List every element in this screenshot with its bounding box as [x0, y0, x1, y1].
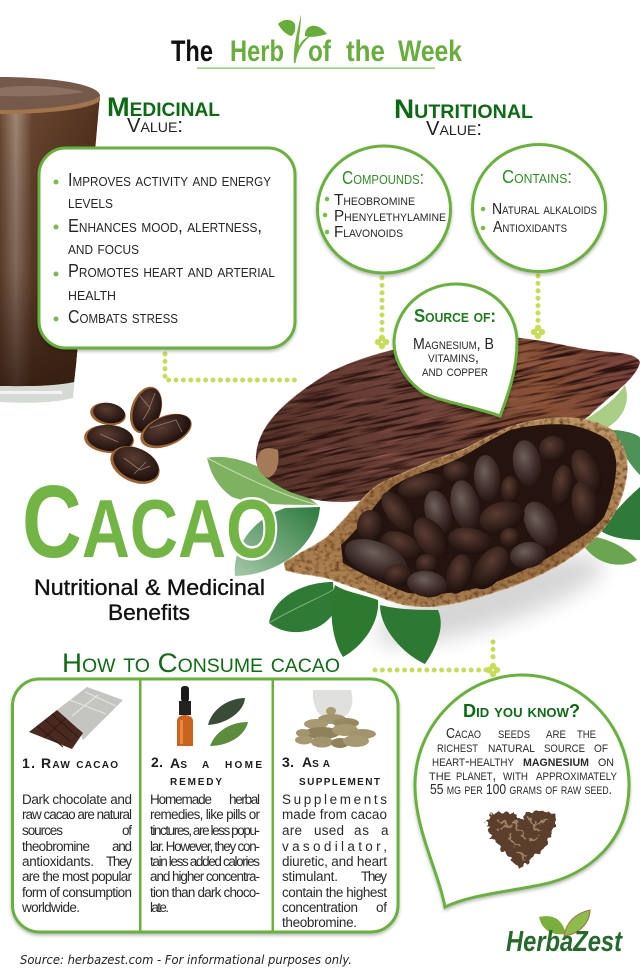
title: The Herb of the Week — [171, 14, 462, 69]
panel: contains circle: Contains: — [502, 167, 572, 187]
column: raw cacao: raw cacao are natural — [22, 807, 132, 822]
column: raw cacao: worldwide. — [21, 900, 80, 915]
icon: heart of cacao shavings — [488, 810, 556, 868]
column: supplement: of — [376, 900, 387, 915]
panel: source of bubble: Magnesium, B — [413, 336, 494, 353]
panel: contains circle: Natural alkaloids — [492, 201, 597, 218]
image: green leaves — [207, 385, 640, 664]
column: home remedy: a — [202, 755, 209, 771]
panel: compounds circle: Phenylethylamine — [334, 208, 446, 225]
column: raw cacao: antioxidants. — [22, 854, 94, 869]
panel: medicinal value list: and focus — [68, 238, 139, 258]
panel: medicinal value list — [39, 148, 295, 348]
column: raw cacao: form of consumption — [22, 885, 132, 900]
column: supplement: contain the highest — [282, 885, 387, 900]
column: raw cacao: sources — [22, 823, 63, 838]
column: home remedy: tain less added calories — [150, 854, 260, 869]
heading: Nutritional Value: Value: — [426, 118, 482, 140]
panel: did you know bubble: natural — [488, 739, 535, 756]
column: raw cacao: are the most popular — [22, 869, 132, 884]
panel: did you know bubble: the — [577, 725, 596, 742]
panel: did you know bubble: are — [546, 725, 566, 742]
column: home remedy: As — [170, 755, 187, 771]
column: supplement: are — [282, 823, 302, 838]
column: supplement: They — [361, 869, 387, 884]
panel: did you know bubble: approximately — [536, 767, 618, 784]
column: supplement: Supplements — [282, 792, 387, 807]
panel: did you know bubble: Cacao — [446, 725, 481, 742]
icon: dropper bottle and leaves — [177, 686, 248, 746]
column: supplement: a — [381, 823, 389, 838]
column: supplement: theobromine. — [282, 915, 357, 930]
panel: did you know bubble: with — [503, 767, 528, 784]
panel: did you know bubble: source — [544, 739, 585, 756]
panel: did you know bubble: the — [429, 767, 451, 784]
column: raw cacao: theobromine — [22, 839, 90, 854]
panel: source of bubble: Source of: — [414, 306, 496, 326]
heading: Medicinal Value: Medicinal — [107, 92, 220, 122]
heading: Cacao: CACAO — [22, 464, 278, 579]
image: open cacao pod with beans — [284, 418, 627, 607]
column: raw cacao: and — [112, 839, 132, 854]
column: supplement: used — [314, 823, 344, 838]
title: The Herb of the Week: The — [171, 35, 213, 68]
subtitle: Nutritional and Medicinal Benefits: Benefits — [108, 600, 190, 625]
panel: did you know bubble: seeds — [498, 725, 530, 742]
column: home remedy — [150, 686, 262, 915]
column: supplement: made from cacao — [282, 807, 387, 822]
title: The Herb of the Week: of — [308, 35, 332, 68]
icon: chocolate bar — [29, 687, 123, 749]
column: home remedy: late. — [150, 900, 169, 915]
connector: contains dotted line — [531, 276, 545, 339]
column: supplement: diuretic, and heart — [282, 854, 387, 869]
icon: logo leaves — [539, 910, 590, 936]
panel: medicinal value list: health — [68, 284, 116, 304]
column: supplement: supplement — [299, 772, 380, 788]
column: supplement: vasodilator, — [282, 839, 387, 854]
column: home remedy: home — [225, 755, 262, 771]
column: home remedy: tinctures, are less popu- — [150, 823, 260, 838]
image: chocolate smoothie glass — [0, 77, 100, 403]
column: raw cacao: of — [122, 823, 132, 838]
connector: did you know dotted line — [375, 642, 500, 677]
column: supplement — [282, 690, 389, 930]
column: raw cacao: They — [106, 854, 132, 869]
connector: compounds dotted line — [375, 278, 389, 349]
panel: compounds circle: Flavonoids — [334, 224, 403, 241]
column: home remedy: remedies, like pills or — [150, 807, 260, 822]
image: closed cacao pod — [222, 258, 640, 580]
shadow under open pod — [368, 538, 612, 662]
panel: source of bubble: vitamins, — [428, 349, 479, 366]
column: supplement: as — [354, 823, 369, 838]
panel: did you know bubble: Did you know? — [463, 701, 580, 721]
column: home remedy: herbal — [229, 792, 260, 807]
column: raw cacao: Raw cacao — [41, 755, 118, 771]
heading: Nutritional Value: Nutritional — [394, 94, 533, 124]
heading: How to Consume cacao: How to Consume cacao — [62, 648, 340, 678]
column: supplement: stimulant. — [282, 869, 338, 884]
column: home remedy: lar. However, they con- — [150, 839, 260, 854]
logo: HerbaZest — [506, 910, 623, 958]
column: raw cacao: 1. — [22, 755, 35, 771]
panel: medicinal value list: Improves activity and energy — [68, 170, 271, 190]
panel: did you know bubble: planet, — [456, 767, 496, 784]
subtitle: Nutritional and Medicinal Benefits — [34, 575, 265, 625]
column: supplement: As a — [302, 754, 330, 770]
source note: Source: herbazest.com - For informational purposes only. — [20, 953, 352, 967]
icon: green sprout — [278, 14, 327, 63]
panel: compounds circle — [318, 146, 450, 273]
column: raw cacao — [21, 687, 132, 915]
column: supplement: 3. — [282, 754, 294, 770]
column: supplement: concentration — [282, 900, 358, 915]
panel: source of bubble — [394, 284, 517, 416]
panel: did you know bubble: on — [598, 753, 614, 770]
title: The Herb of the Week: the — [346, 35, 385, 68]
column: home remedy: remedy — [170, 772, 222, 788]
column: raw cacao: Dark chocolate and — [22, 792, 132, 807]
heading: Medicinal Value: Value: — [127, 115, 183, 137]
panel: how to consume table — [12, 679, 398, 932]
title: The Herb of the Week: Week — [398, 35, 462, 68]
panel: compounds circle: Theobromine — [334, 192, 415, 209]
panel: did you know bubble: of — [594, 739, 608, 756]
panel: source of bubble: and copper — [422, 363, 488, 380]
column: home remedy: Homemade — [150, 792, 212, 807]
panel: medicinal value list: Promotes heart and arterial — [68, 261, 275, 281]
panel: medicinal value list: Enhances mood, alertness, — [68, 216, 262, 236]
panel: did you know bubble — [415, 675, 629, 907]
heading: Nutritional Value — [394, 94, 533, 140]
panel: did you know bubble: richest — [437, 739, 478, 756]
panel: compounds circle: Compounds: — [342, 168, 424, 188]
panel: medicinal value list: levels — [68, 192, 113, 212]
connector: medicinal box dotted line — [165, 354, 296, 380]
panel: did you know bubble: heart-healthy — [432, 753, 515, 770]
column: home remedy: and higher concentra- — [150, 869, 260, 884]
subtitle: Nutritional and Medicinal Benefits: Nutritional & Medicinal — [34, 575, 265, 600]
column: home remedy: tion than dark choco- — [150, 885, 260, 900]
panel: did you know bubble: magnesium — [523, 753, 589, 770]
panel: medicinal value list: Combats stress — [68, 307, 178, 327]
heading: Medicinal Value — [107, 92, 220, 137]
icon: supplement tablets — [295, 690, 376, 748]
title: The Herb of the Week: Herb — [230, 35, 284, 68]
panel: contains circle — [472, 144, 606, 272]
panel: contains circle: Antioxidants — [493, 219, 567, 236]
column: home remedy: 2. — [151, 754, 163, 770]
image: five cacao beans — [83, 383, 197, 491]
